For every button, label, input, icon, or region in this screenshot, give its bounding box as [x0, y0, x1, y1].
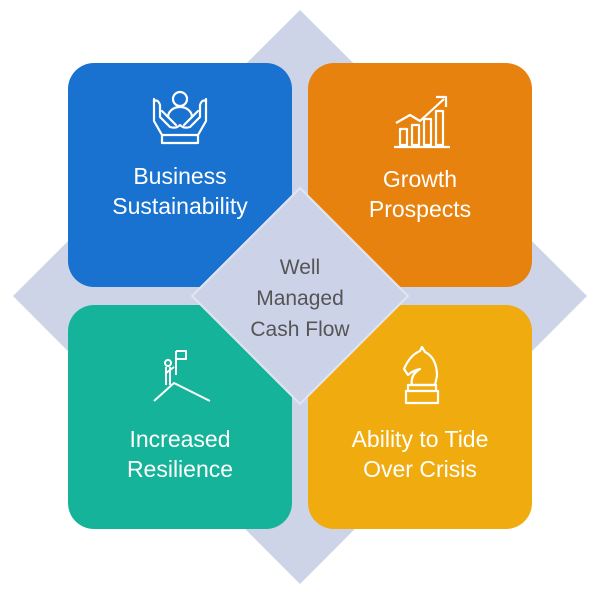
center diamond: well managed cash flow: Cash Flow	[250, 318, 350, 341]
panel: ability to tide over crisis	[308, 305, 532, 529]
panel: increased resilience	[68, 305, 292, 529]
panel: ability to tide over crisis: Ability to Tide	[352, 426, 488, 452]
panel: increased resilience: Increased	[129, 426, 230, 452]
icon: growth chart	[394, 96, 450, 148]
center diamond: well managed cash flow: Well	[280, 256, 320, 279]
icon: flag on mountain	[153, 350, 210, 402]
icon: chess knight	[402, 346, 440, 404]
icon: hands holding person	[152, 90, 208, 144]
panel: growth prospects: Growth	[383, 166, 457, 192]
panel: growth prospects: Prospects	[369, 196, 471, 222]
panel: business sustainability: Business	[133, 163, 227, 189]
center diamond: well managed cash flow: Managed	[256, 287, 344, 310]
panel: growth prospects	[308, 63, 532, 287]
panel: increased resilience: Resilience	[127, 456, 233, 482]
panel: ability to tide over crisis: Over Crisis	[363, 456, 477, 482]
panel: business sustainability: Sustainability	[112, 193, 248, 219]
panel: business sustainability	[68, 63, 292, 287]
